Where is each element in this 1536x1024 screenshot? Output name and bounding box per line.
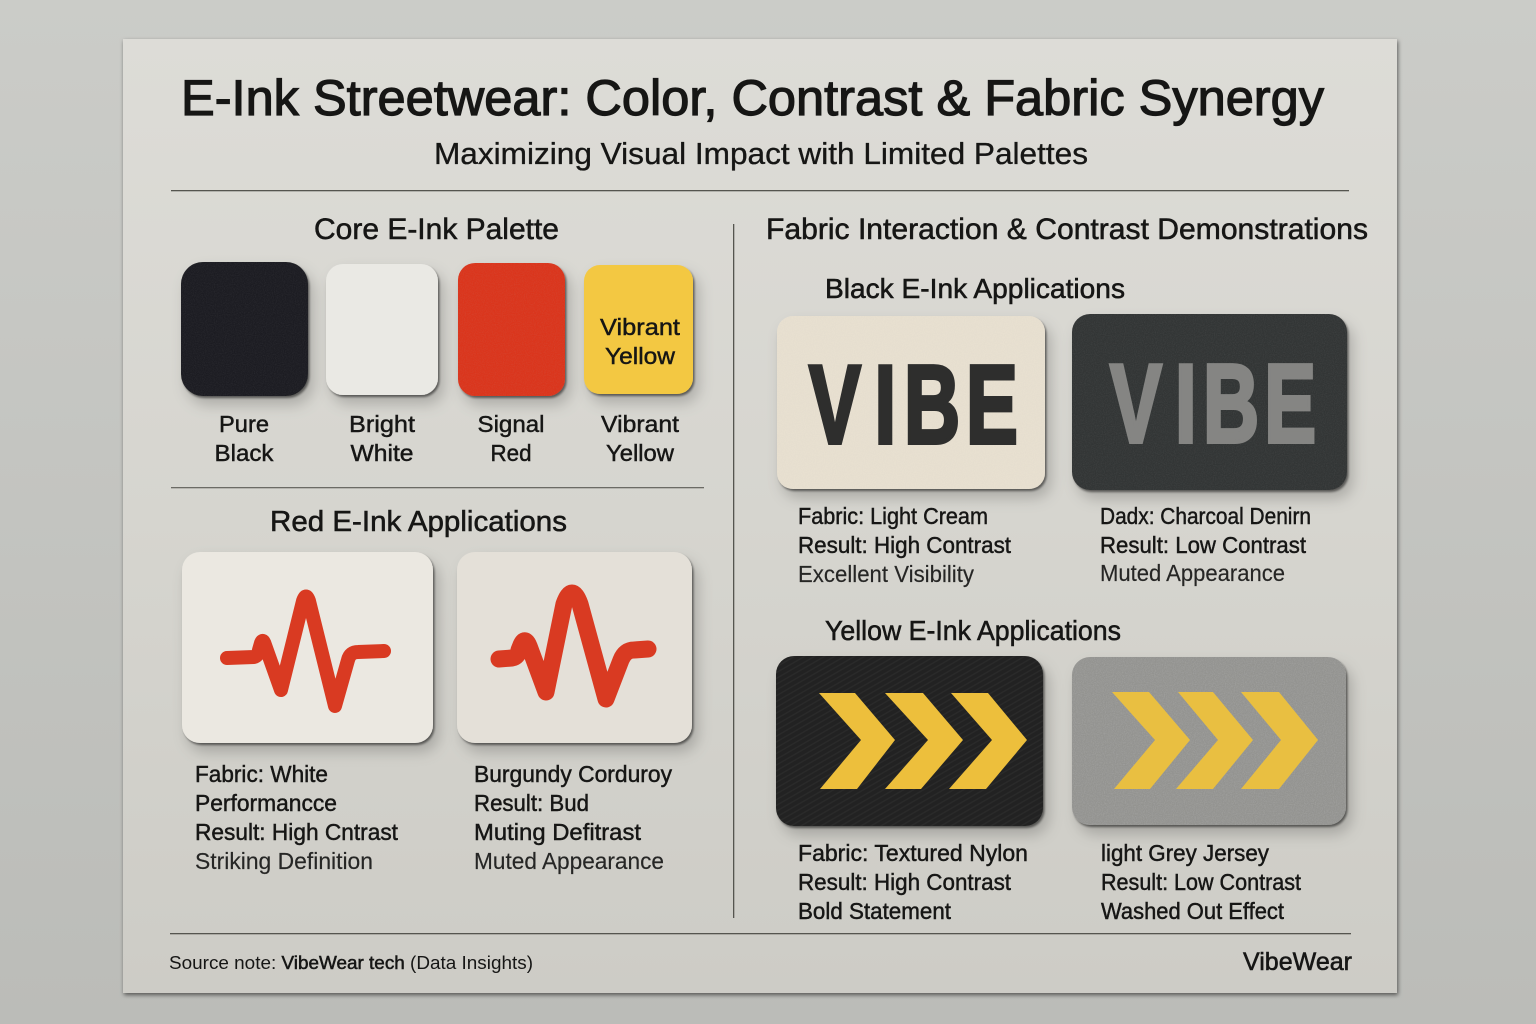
icon: thick pulse line <box>499 593 648 699</box>
text: burgundy corduroy result: Burgundy Corduroy <box>474 761 672 787</box>
heading: fabric interaction and contrast demonstrations: Fabric Interaction & Contrast Demonstrations <box>766 213 1368 246</box>
main card panel <box>123 39 1397 993</box>
text: charcoal denim result: Muted Appearance <box>1100 560 1285 586</box>
text: light cream result: Excellent Visibility <box>798 561 974 587</box>
swatch: bright white <box>326 264 438 466</box>
text: light grey jersey result <box>1101 840 1302 924</box>
card: vibe on light cream: VIBE <box>809 343 1018 467</box>
text: white fabric result: Result: High Cntrast <box>195 819 399 845</box>
text: light grey jersey result: light Grey Jersey <box>1101 840 1269 866</box>
text: textured nylon result <box>798 840 1028 924</box>
text: charcoal denim result: Result: Low Contrast <box>1100 532 1307 558</box>
card: vibe on light cream <box>777 316 1045 489</box>
text: charcoal denim result <box>1100 503 1311 586</box>
card: vibe on charcoal denim: VIBE <box>1110 342 1316 466</box>
swatch: signal red: Red <box>490 440 532 466</box>
card: red pulse on white <box>182 552 433 743</box>
icon: thin pulse line <box>227 596 384 706</box>
panel: core e-ink palette <box>181 213 693 466</box>
panel: red e-ink applications <box>182 506 692 874</box>
swatch: pure black <box>181 262 308 466</box>
swatch: signal red: Signal <box>478 411 544 437</box>
swatch: vibrant yellow <box>584 265 693 466</box>
text: burgundy corduroy result <box>474 761 672 874</box>
panel: black e-ink applications <box>777 273 1347 587</box>
text: light cream result: Fabric: Light Cream <box>798 503 988 529</box>
swatch: pure black: Black <box>214 440 274 466</box>
swatch: vibrant yellow: Yellow <box>606 440 674 466</box>
swatch: signal red <box>458 263 565 466</box>
text: textured nylon result: Bold Statement <box>798 898 952 924</box>
card: vibe on charcoal denim <box>1072 314 1347 490</box>
text: textured nylon result: Result: High Contrast <box>798 869 1012 895</box>
text: white fabric result: Striking Definition <box>195 848 373 874</box>
swatch: vibrant yellow: Yellow <box>605 343 675 369</box>
card: chevrons on textured nylon <box>776 656 1043 826</box>
brand: vibewear: VibeWear <box>1243 948 1352 976</box>
text: burgundy corduroy result: Muted Appearance <box>474 848 664 874</box>
text: charcoal denim result: Dadx: Charcoal Denirn <box>1100 503 1311 529</box>
source note: Source note: VibeWear tech (Data Insights) <box>169 953 533 973</box>
text: textured nylon result: Fabric: Textured Nylon <box>798 840 1028 866</box>
heading: core e-ink palette: Core E-Ink Palette <box>314 213 559 246</box>
swatch: bright white: Bright <box>349 411 416 437</box>
panel: yellow e-ink applications <box>776 615 1346 924</box>
swatch: vibrant yellow: Vibrant <box>601 411 680 437</box>
heading: yellow e-ink applications: Yellow E-Ink Applications <box>825 615 1121 646</box>
title: E-Ink Streetwear: Color, Contrast & Fabric Synergy <box>181 70 1324 126</box>
text: white fabric result: Performancce <box>195 790 337 816</box>
swatch: vibrant yellow: Vibrant <box>600 314 681 340</box>
subtitle: Maximizing Visual Impact with Limited Palettes <box>434 136 1088 171</box>
swatch: pure black: Pure <box>219 411 269 437</box>
card: chevrons on light grey jersey <box>1072 657 1346 825</box>
card: red pulse on burgundy corduroy <box>457 552 692 743</box>
text: light cream result <box>798 503 1012 587</box>
text: light grey jersey result: Result: Low Contrast <box>1101 869 1302 895</box>
text: burgundy corduroy result: Result: Bud <box>474 790 589 816</box>
heading: red e-ink applications: Red E-Ink Applications <box>270 506 567 538</box>
heading: black e-ink applications: Black E-Ink Applications <box>825 273 1125 304</box>
text: white fabric result <box>195 761 399 874</box>
icon: yellow chevrons low contrast <box>1112 692 1318 789</box>
text: white fabric result: Fabric: White <box>195 761 328 787</box>
text: light cream result: Result: High Contrast <box>798 532 1012 558</box>
swatch: bright white: White <box>350 440 414 466</box>
text: burgundy corduroy result: Muting Defitrast <box>474 819 642 845</box>
icon: yellow chevrons high contrast <box>819 693 1027 789</box>
text: light grey jersey result: Washed Out Effect <box>1101 898 1285 924</box>
